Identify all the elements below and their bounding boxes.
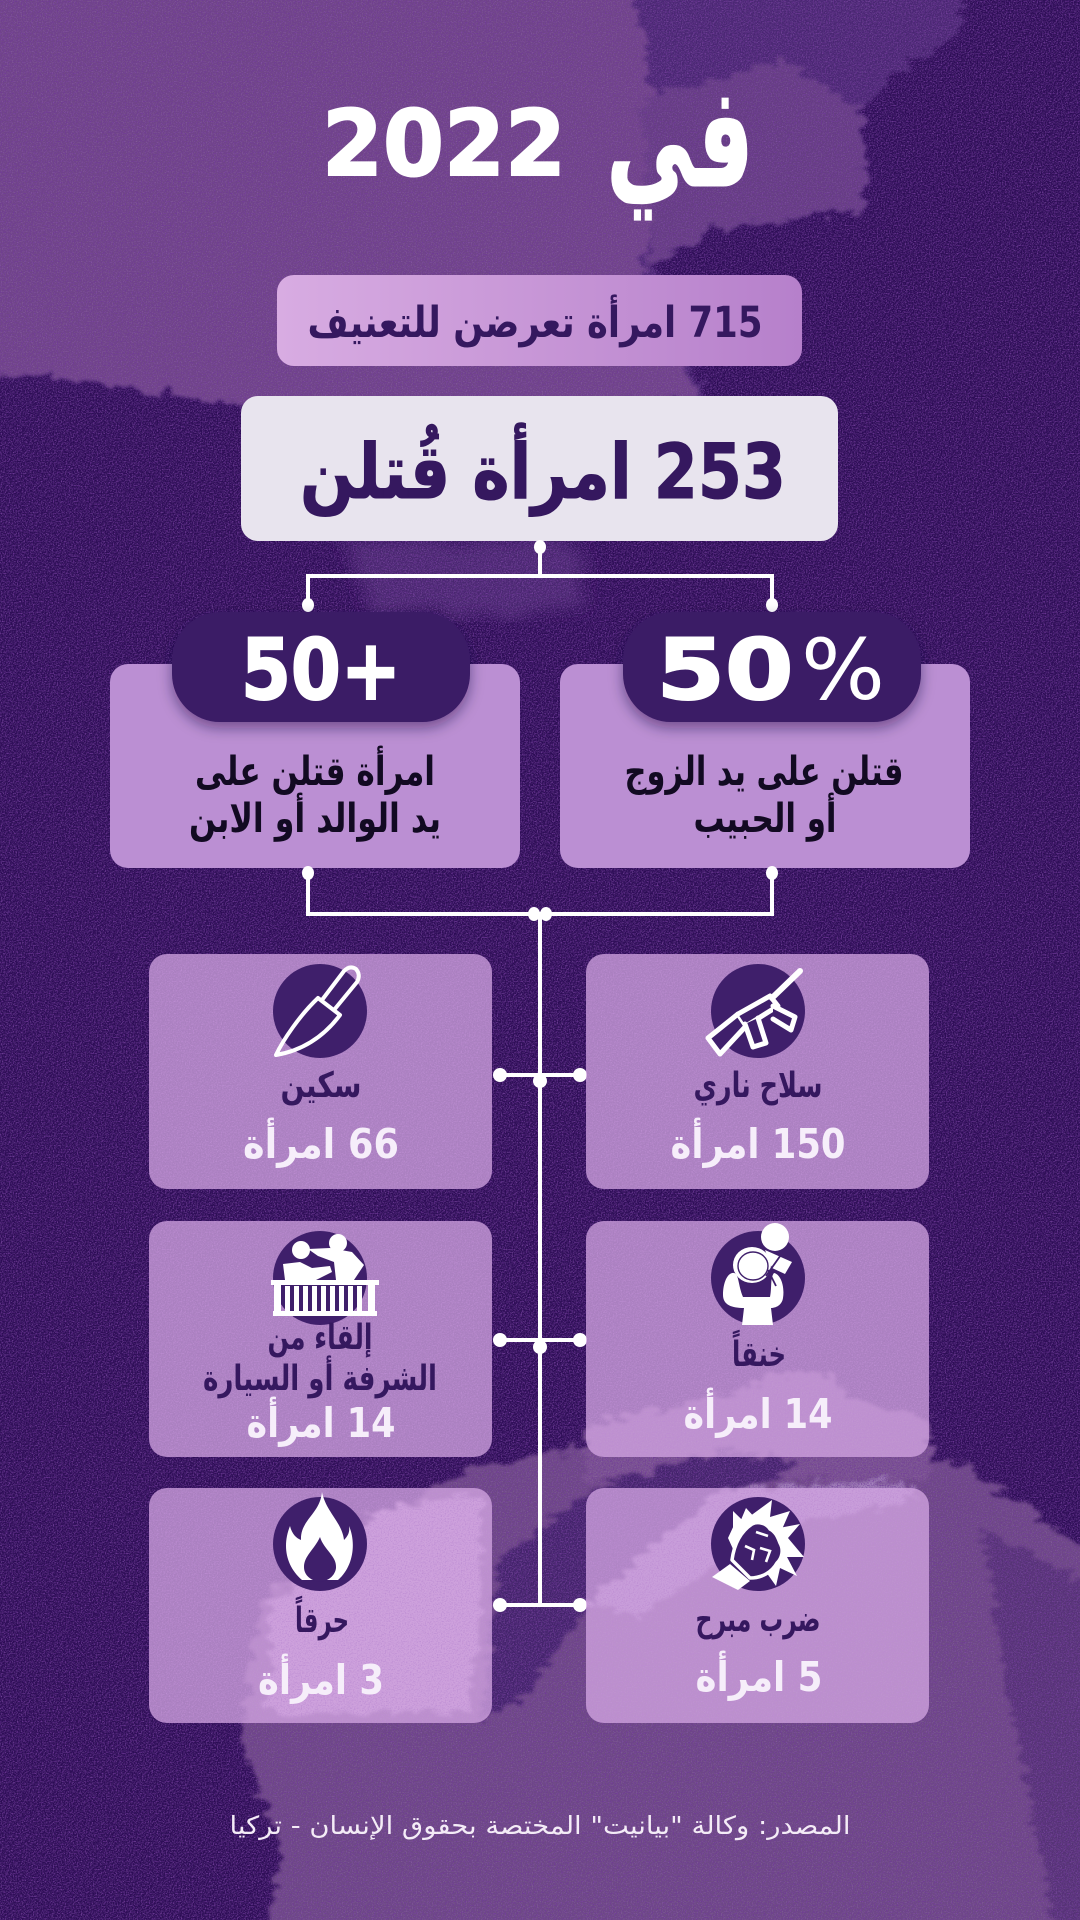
label line 2: الشرفة أو السيارة [203,1355,437,1399]
badge: 50% [623,612,921,722]
killed text: 253 امرأة قُتلن [300,422,786,517]
badge percent sign: % [801,621,885,719]
card: strangling [586,1221,929,1457]
text line 1: امرأة قتلن على [195,745,435,795]
icon: fist with burst [711,1497,805,1591]
badge number: 50 [656,621,794,719]
badge number: 50+ [241,621,401,719]
icon: pushed from balcony [271,1231,379,1325]
connector: killed to categories [302,540,778,612]
badge: 50+ [172,612,470,722]
value: 14 امرأة [247,1396,396,1447]
label line 1: إلقاء من [268,1318,372,1358]
icon: rifle [708,964,805,1058]
title [322,57,754,220]
card: balcony or car [149,1221,492,1457]
icon: flame [273,1492,367,1591]
source note: المصدر: وكالة "بيانيت" المختصة بحقوق الإنسان - تركيا [230,1811,850,1841]
card: severe beating [586,1488,929,1723]
title word: في [606,57,754,220]
label: سلاح ناري [694,1066,822,1106]
panel: 715 women subjected to violence [277,275,802,366]
card: knife [149,954,492,1189]
value: 3 امرأة [258,1653,384,1704]
value: 14 امرأة [684,1387,832,1438]
connector: central trunk [302,866,778,1612]
label: حرقاً [295,1595,349,1641]
value: 150 امرأة [670,1117,846,1168]
text line 1: قتلن على يد الزوج [624,749,904,795]
panel: father or son 50+ [110,612,520,868]
label: ضرب مبرح [696,1600,820,1640]
text line 2: يد الوالد أو الابن [189,792,441,842]
pill text: 715 امرأة تعرضن للتعنيف [308,294,762,348]
background: bottom brush stroke [240,1365,1080,1920]
title year: 2022 [322,92,566,197]
card: burning [149,1488,492,1723]
label: خنقاً [732,1329,786,1375]
background: top brush stroke [0,0,965,615]
text line 2: أو الحبيب [694,792,836,842]
value: 66 امرأة [243,1117,399,1168]
card: firearm [586,954,929,1189]
icon: strangling figures [711,1223,805,1325]
panel: husband or partner 50% [560,612,970,868]
label: سكين [280,1066,362,1106]
panel: 253 women killed [241,396,838,541]
icon: knife [273,964,367,1058]
value: 5 امرأة [696,1650,822,1701]
